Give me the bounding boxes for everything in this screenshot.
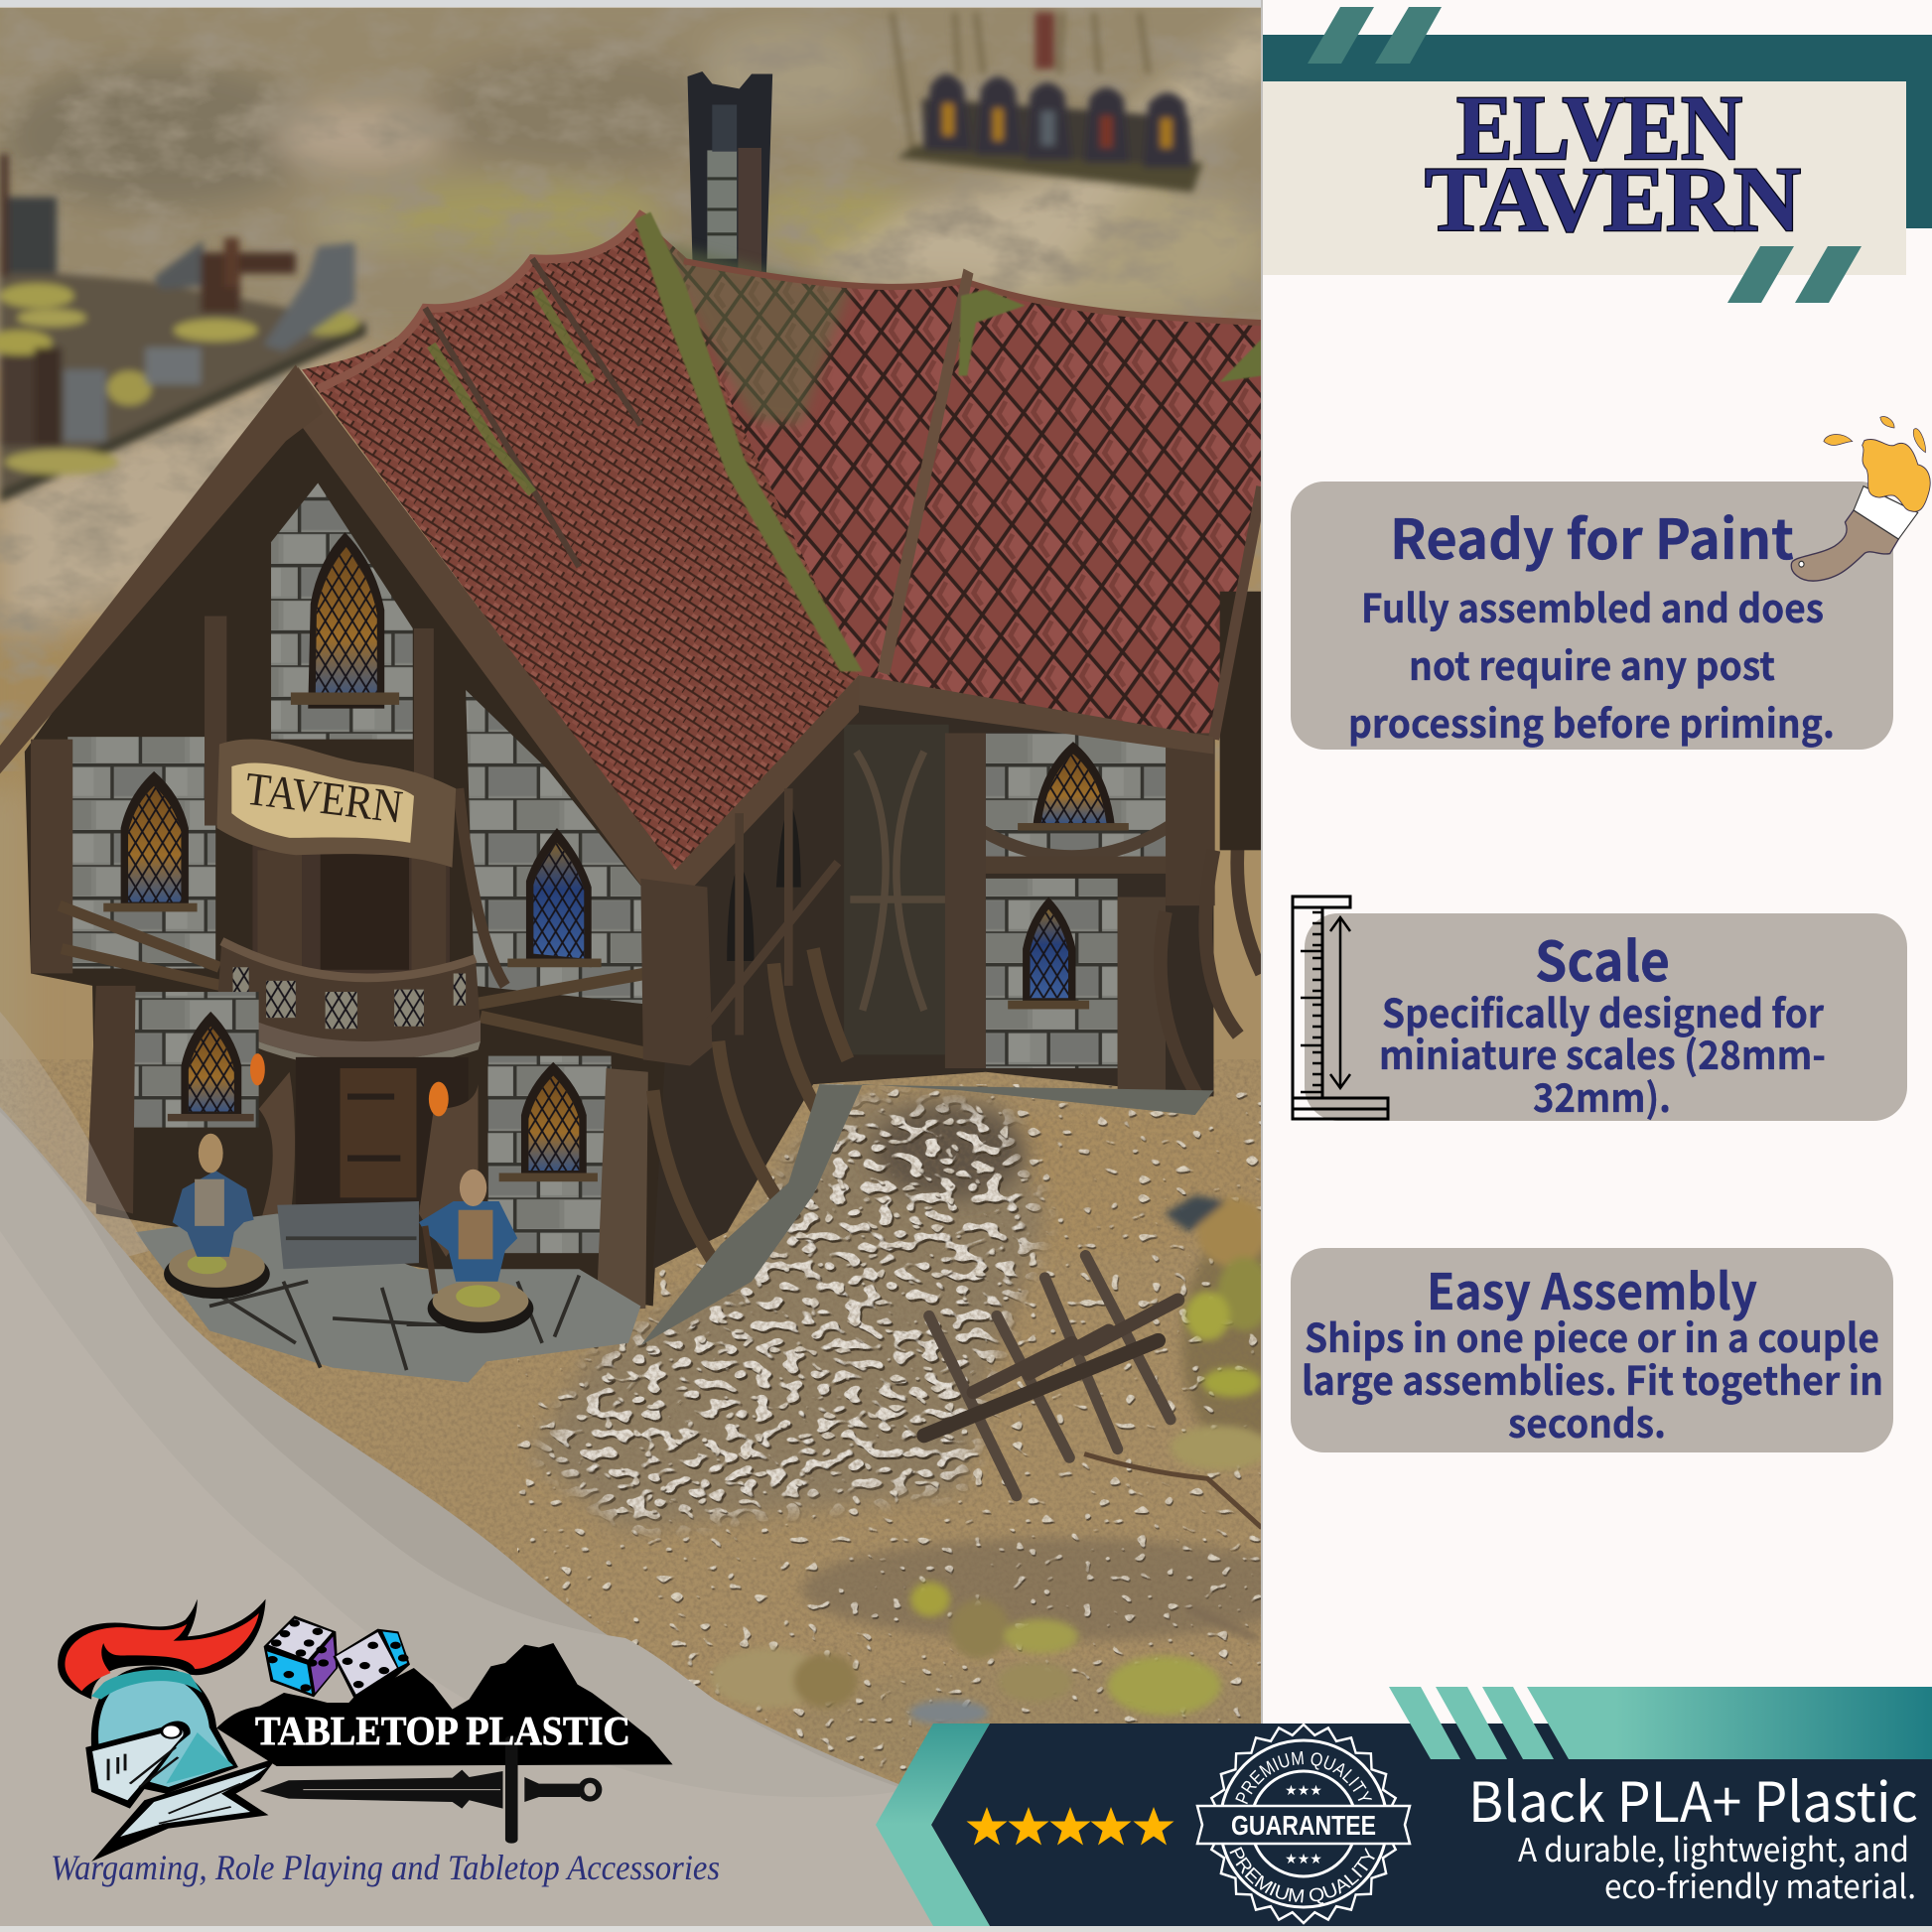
body text: not require any post	[1409, 635, 1775, 692]
tavern sign: TAVERN	[242, 763, 405, 834]
material description: A durable, lightweight, and	[1518, 1824, 1909, 1871]
teal header band	[1263, 35, 1932, 228]
badge arc text bottom: PREMIUM QUALITY	[1229, 1847, 1375, 1904]
right-hand wing wall	[653, 486, 1262, 1269]
body text: Specifically designed for	[1382, 983, 1825, 1039]
logo dice	[264, 1615, 410, 1698]
panel background	[1291, 1248, 1893, 1452]
heading: Easy Assembly	[1427, 1253, 1757, 1324]
blurred background terrain	[0, 8, 1261, 1024]
miniature figures	[164, 1134, 533, 1333]
logo helmet	[85, 1666, 238, 1809]
left shingled roof	[302, 211, 863, 873]
badge arc text top: PREMIUM QUALITY	[1235, 1751, 1372, 1805]
title text: TAVERN	[1425, 149, 1801, 251]
diagonal teal stripes	[1389, 1687, 1554, 1759]
body text: miniature scales (28mm-	[1379, 1025, 1826, 1081]
body text: processing before priming.	[1348, 693, 1835, 750]
logo mountains	[216, 1643, 673, 1766]
grass tufts and rocks	[711, 1195, 1272, 1725]
tavern sign	[216, 740, 456, 868]
background ruin diorama	[0, 154, 366, 502]
right scale-tile roof	[643, 219, 1262, 740]
background mottling	[0, 7, 1262, 771]
logo tagline: Wargaming, Role Playing and Tabletop Accessories	[51, 1848, 720, 1887]
logo: Tabletop Plastic	[51, 1599, 720, 1887]
badge ribbon	[1197, 1806, 1410, 1844]
bottom-left curved panel	[0, 1012, 933, 1926]
balcony	[216, 941, 481, 1068]
panel: ready for paint	[1291, 482, 1893, 750]
badge jagged edge	[1208, 1725, 1399, 1923]
title text	[1425, 77, 1801, 251]
body text	[1348, 578, 1835, 750]
body text: Fully assembled and does	[1361, 578, 1824, 634]
photo: elven tavern diorama	[0, 0, 1330, 1927]
dark banner background	[931, 1724, 1932, 1926]
icon: ruler with height arrow	[1293, 897, 1388, 1119]
guarantee badge	[1195, 1724, 1412, 1925]
body text: large assemblies. Fit together in	[1302, 1350, 1883, 1407]
dirt ground tones	[799, 1249, 1261, 1644]
logo artwork	[58, 1599, 673, 1862]
logo sword	[260, 1735, 602, 1844]
gable stone and upper window	[271, 483, 413, 740]
main roof eaves	[0, 364, 1213, 897]
body text: Ships in one piece or in a couple	[1305, 1308, 1879, 1364]
logo wordmark: TABLETOP PLASTIC	[255, 1708, 630, 1753]
heading: Ready for Paint	[1390, 495, 1794, 575]
front right wall with window	[459, 690, 647, 1053]
front left wall	[31, 617, 434, 986]
material description second line: eco-friendly material.	[1604, 1861, 1916, 1908]
logo plume	[58, 1599, 266, 1700]
body text	[1302, 1308, 1883, 1449]
logo wing blade	[91, 1758, 277, 1862]
ground floor walls and door	[123, 992, 612, 1257]
facade body	[25, 369, 675, 1307]
stone paving	[136, 1084, 1213, 1382]
panel: scale	[1305, 913, 1907, 1124]
body text: 32mm).	[1533, 1067, 1671, 1124]
right wing windows	[1008, 742, 1129, 1009]
heading: Scale	[1535, 917, 1670, 997]
title block	[1263, 7, 1932, 303]
material heading: Black PLA+ Plastic	[1468, 1758, 1918, 1838]
panel: easy assembly	[1291, 1248, 1893, 1452]
bottom slanted accents	[1727, 246, 1862, 303]
top slanted accents	[1308, 7, 1442, 64]
body text: seconds.	[1508, 1393, 1666, 1449]
ground grain	[0, 1059, 1261, 1783]
panel background	[1291, 482, 1893, 750]
wooden supports	[86, 788, 848, 1311]
badge guarantee label: GUARANTEE	[1231, 1810, 1376, 1841]
panel background	[1305, 913, 1907, 1121]
scattered pebbles	[517, 1084, 1262, 1774]
footer material text	[1468, 1758, 1918, 1908]
chimney	[688, 71, 772, 274]
entrance bay with upper door	[252, 838, 450, 973]
teal gradient bar	[1527, 1687, 1932, 1759]
cream title panel	[1263, 81, 1906, 275]
title text: ELVEN	[1456, 77, 1742, 180]
teal chevron	[876, 1724, 990, 1926]
five gold stars	[967, 1807, 1173, 1845]
badge rings	[1220, 1740, 1387, 1907]
badge small stars top: ★★★	[1285, 1783, 1322, 1799]
footer banner	[876, 1687, 1932, 1926]
body text	[1379, 983, 1826, 1124]
background army miniatures	[893, 12, 1202, 193]
badge small stars bottom: ★★★	[1285, 1852, 1322, 1867]
icon: paint brush	[1791, 416, 1930, 581]
wooden barricade	[924, 1256, 1262, 1528]
ground base	[0, 319, 1261, 1926]
cobblestone path	[517, 1084, 1261, 1771]
